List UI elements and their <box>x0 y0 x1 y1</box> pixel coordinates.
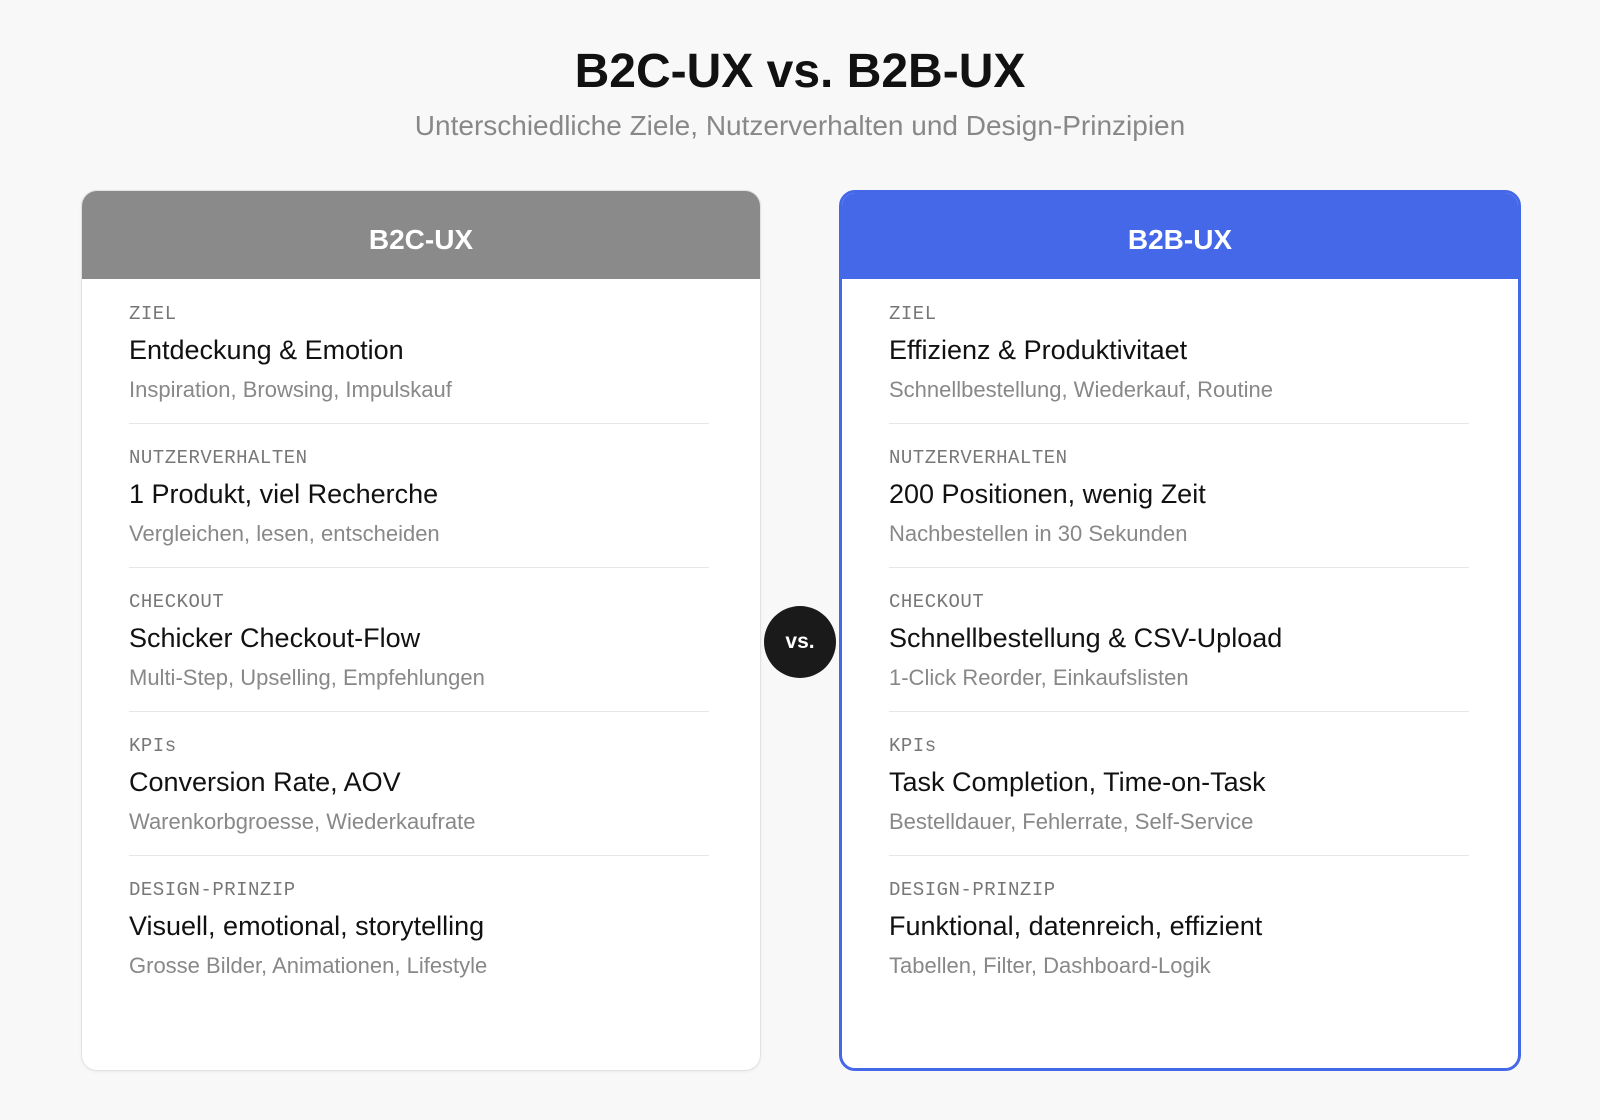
row: KPIs: KPIs <box>129 735 177 757</box>
row: Ziel <box>129 303 709 424</box>
panel: B2B <box>839 190 1521 1071</box>
row: Nutzerverhalten: 1 Produkt, viel Recherche <box>129 479 438 509</box>
row: Ziel <box>889 303 1469 424</box>
row: Checkout: CHECKOUT <box>889 591 984 613</box>
row: KPIs <box>889 735 1469 856</box>
row: Nutzerverhalten <box>889 447 1469 568</box>
row: Ziel: Entdeckung & Emotion <box>129 335 404 365</box>
row: Checkout <box>889 591 1469 712</box>
row: Checkout <box>129 591 709 712</box>
row: Nutzerverhalten: NUTZERVERHALTEN <box>129 447 308 469</box>
row: KPIs: Task Completion, Time-on-Task <box>889 767 1266 797</box>
row: Ziel: Schnellbestellung, Wiederkauf, Routine <box>889 377 1273 402</box>
row: KPIs <box>129 735 709 856</box>
row: Ziel: ZIEL <box>889 303 937 325</box>
row: Nutzerverhalten: 200 Positionen, wenig Zeit <box>889 479 1206 509</box>
row: Nutzerverhalten: NUTZERVERHALTEN <box>889 447 1068 469</box>
row: KPIs: Warenkorbgroesse, Wiederkaufrate <box>129 809 475 834</box>
header: B2C <box>82 191 760 279</box>
row: Design-Prinzip: Grosse Bilder, Animationen, Lifestyle <box>129 953 487 978</box>
row: Ziel: Inspiration, Browsing, Impulskauf <box>129 377 452 402</box>
row: Nutzerverhalten: Vergleichen, lesen, entscheiden <box>129 521 440 546</box>
vs badge <box>764 606 836 678</box>
row: Design-Prinzip: DESIGN-PRINZIP <box>129 879 296 901</box>
header: B2B <box>842 193 1518 279</box>
row: Ziel: ZIEL <box>129 303 177 325</box>
header: B2C: B2C-UX <box>369 224 473 255</box>
row: Checkout: 1-Click Reorder, Einkaufslisten <box>889 665 1189 690</box>
row: Ziel: Effizienz & Produktivitaet <box>889 335 1187 365</box>
panel: B2C <box>81 190 761 1071</box>
row: Checkout: Schnellbestellung & CSV-Upload <box>889 623 1282 653</box>
row: Design-Prinzip: DESIGN-PRINZIP <box>889 879 1056 901</box>
row: Design-Prinzip: Tabellen, Filter, Dashboard-Logik <box>889 953 1211 978</box>
subtitle: Unterschiedliche Ziele, Nutzerverhalten und Design-Prinzipien <box>415 110 1185 141</box>
header: B2B: B2B-UX <box>1128 224 1232 255</box>
row: Checkout: CHECKOUT <box>129 591 224 613</box>
title: B2C-UX vs. B2B-UX <box>575 45 1025 98</box>
row: Checkout: Multi-Step, Upselling, Empfehlungen <box>129 665 485 690</box>
row: Design-Prinzip <box>889 879 1262 978</box>
row: KPIs: KPIs <box>889 735 937 757</box>
row: Checkout: Schicker Checkout-Flow <box>129 623 420 653</box>
vs badge: vs. <box>785 630 815 653</box>
row: Nutzerverhalten: Nachbestellen in 30 Sekunden <box>889 521 1187 546</box>
row: Design-Prinzip: Visuell, emotional, storytelling <box>129 911 484 941</box>
row: Nutzerverhalten <box>129 447 709 568</box>
row: Design-Prinzip <box>129 879 487 978</box>
row: Design-Prinzip: Funktional, datenreich, effizient <box>889 911 1262 941</box>
row: KPIs: Bestelldauer, Fehlerrate, Self-Service <box>889 809 1253 834</box>
row: KPIs: Conversion Rate, AOV <box>129 767 401 797</box>
